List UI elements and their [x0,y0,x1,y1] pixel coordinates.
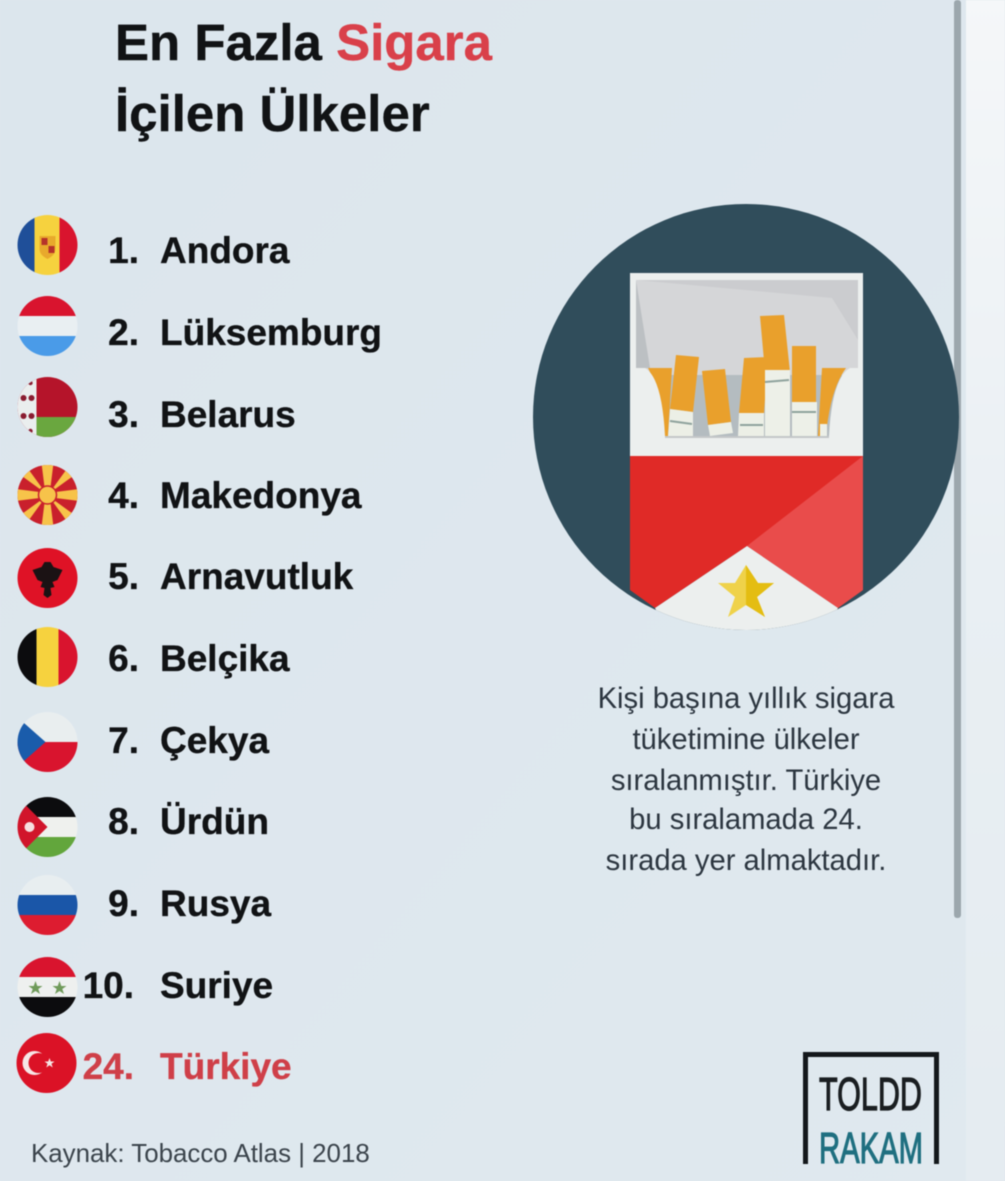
description text: sırada yer almaktadır. [606,845,886,877]
row: Rusya [18,875,271,935]
row: Suriye: Suriye [160,965,273,1006]
description text: bu sıralamada 24. [629,804,863,836]
row: Ürdün: 8. [108,801,139,842]
row: Belçika [18,627,290,687]
row: Makedonya: 4. [108,475,139,516]
pack front pocket [636,368,858,437]
logo [806,1054,936,1173]
description text [598,683,895,877]
row: Ürdün: Ürdün [160,801,269,842]
row: Çekya: Çekya [160,720,269,761]
row: Andora: 1. [108,230,139,271]
row: Türkiye: 24. [83,1046,134,1087]
row: Ürdün [16,795,269,859]
description text: sıralanmıştır. Türkiye [611,765,881,797]
row: Suriye [18,957,273,1017]
pack body [629,272,864,376]
row: Andora: Andora [160,230,290,271]
row: Makedonya [16,463,362,527]
title: İçilen Ülkeler [115,85,430,142]
red label [630,456,863,608]
row: Arnavutluk: 5. [108,556,139,597]
title: En Fazla Sigara [115,14,493,71]
row: Rusya: 9. [108,883,139,924]
title [115,14,493,142]
source note: Kaynak: Tobacco Atlas | 2018 [31,1140,370,1168]
row: Belçika: 6. [108,638,139,679]
star [718,565,774,617]
ranking list [12,215,382,1093]
row: Türkiye: Türkiye [160,1046,292,1087]
row: Arnavutluk: Arnavutluk [160,556,354,597]
row: Rusya: Rusya [160,883,271,924]
row: Belarus: Belarus [160,394,296,435]
row: Lüksemburg: 2. [108,312,139,353]
cigarettes [648,315,846,436]
row: Lüksemburg: Lüksemburg [160,312,382,353]
row: Suriye: 10. [83,965,134,1006]
row: Arnavutluk [18,548,354,608]
illustration: cigarette pack [533,204,959,640]
row: Çekya: 7. [108,720,139,761]
logo: RAKAM [819,1124,923,1173]
description text: Kişi başına yıllık sigara [598,683,895,715]
row: Andora [18,215,290,275]
row: Makedonya: Makedonya [160,475,362,516]
description text: tüketimine ülkeler [632,724,860,756]
logo: TOLDD [819,1068,922,1120]
row: Belçika: Belçika [160,638,290,679]
row: Çekya [12,712,269,772]
row: Belarus [18,377,296,437]
row: Türkiye [16,1033,292,1093]
row: Lüksemburg [18,296,382,356]
divider bar [954,0,961,918]
row: Belarus: 3. [108,394,139,435]
